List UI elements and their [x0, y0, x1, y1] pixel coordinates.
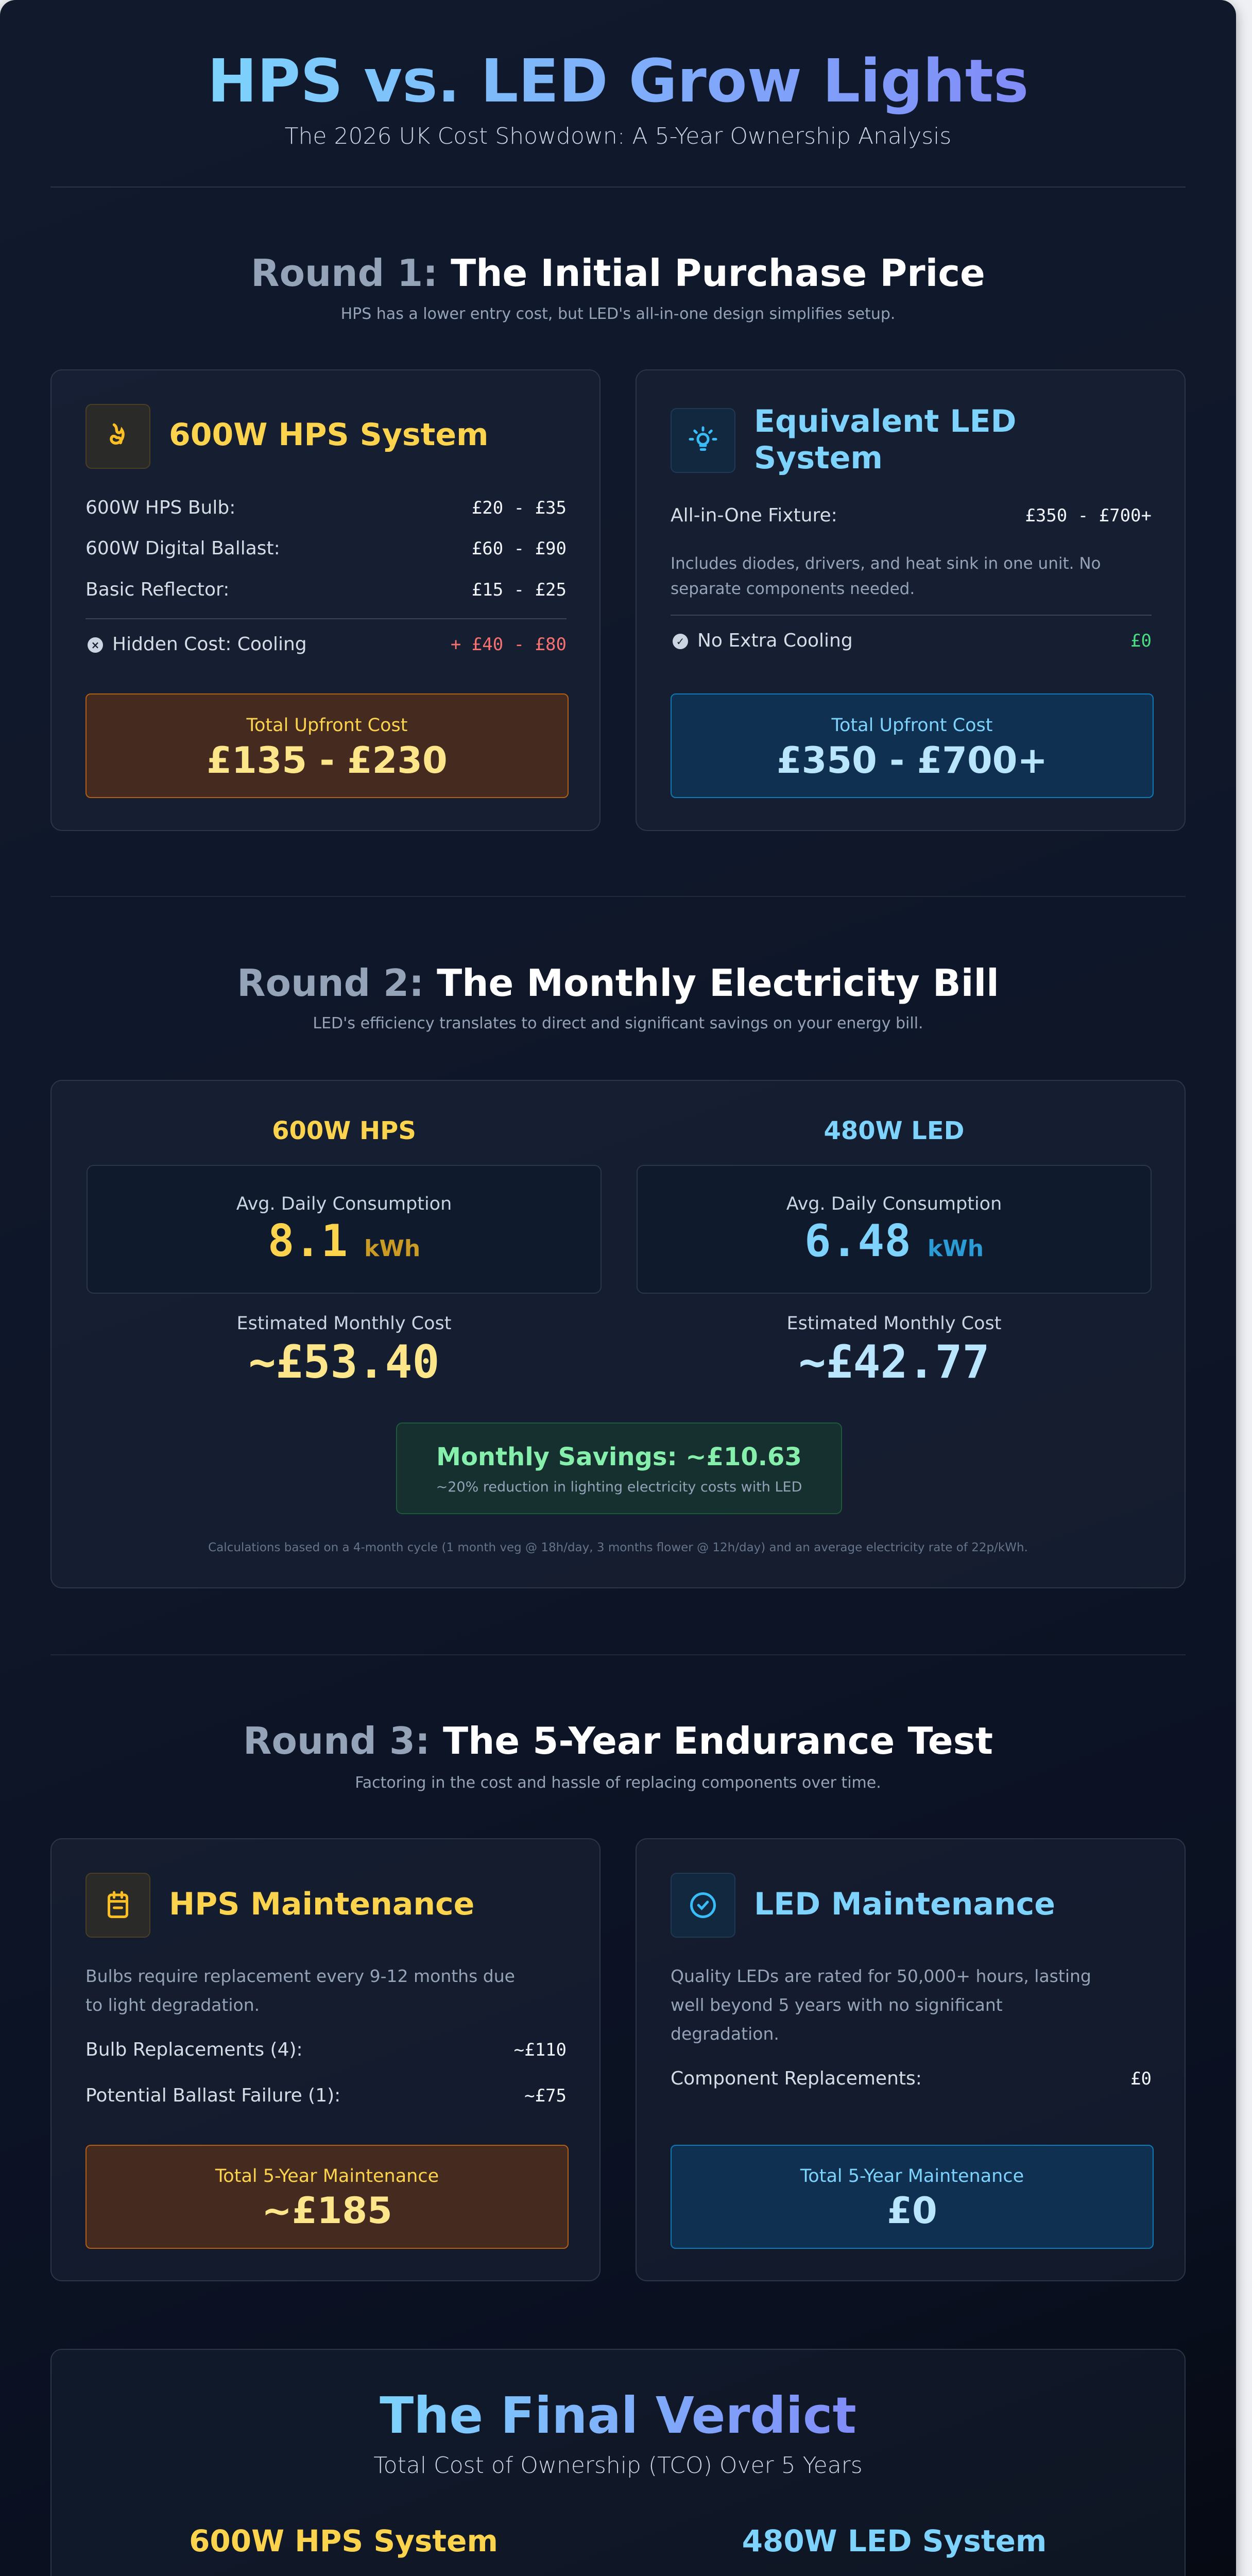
round 2 subheading: LED's efficiency translates to direct and significant savings on your energy bill. [313, 1014, 923, 1032]
round 3 subheading: Factoring in the cost and hassle of replacing components over time. [355, 1774, 881, 1792]
label: 480W LED: 480W LED [824, 1116, 965, 1145]
LED monthly cost: Estimated Monthly Cost [786, 1313, 1001, 1334]
stat box: LED daily consumption: Avg. Daily Consumption [786, 1194, 1002, 1214]
row: ballast [85, 538, 567, 559]
LED monthly cost: ~£42.77 [799, 1335, 989, 1388]
panel: HPS maintenance [50, 1838, 601, 2281]
row: fixture: All-in-One Fixture: [671, 505, 837, 526]
title: HPS vs. LED Grow Lights [208, 47, 1028, 116]
heading: Equivalent LED System: System [754, 440, 883, 476]
text: LED lifespan description: degradation. [671, 2024, 779, 2044]
heading: round 1: Round 1: The Initial Purchase Price [251, 251, 985, 295]
row: no extra cooling: No Extra Cooling [697, 630, 853, 651]
row: ballast failure: ~£75 [524, 2086, 567, 2106]
row: bulb replacements: Bulb Replacements (4): [85, 2039, 303, 2060]
icon: flame [85, 404, 150, 469]
subheading: TCO: Total Cost of Ownership (TCO) Over 5 Years [373, 2452, 863, 2479]
row: ballast: 600W Digital Ballast: [85, 538, 280, 559]
text: LED lifespan description [671, 1966, 1091, 2044]
HPS total: 600W HPS System [189, 2523, 498, 2558]
HPS monthly cost: ~£53.40 [249, 1335, 439, 1388]
heading: Equivalent LED System [754, 403, 1016, 476]
callout: monthly savings: Monthly Savings: ~£10.63 [436, 1443, 802, 1471]
icon: check circle: ✓ [676, 635, 684, 648]
total: HPS maintenance: Total 5-Year Maintenance [215, 2166, 439, 2187]
row: ballast failure: Potential Ballast Failure (1): [85, 2085, 340, 2106]
row: bulb [85, 497, 567, 518]
text: bulb description: Bulbs require replacement every 9-12 months due [85, 1966, 515, 1986]
panel: electricity comparison [50, 1080, 1186, 1588]
row: ballast failure [85, 2085, 567, 2106]
row: hidden cooling cost: + £40 - £80 [451, 634, 567, 655]
stat box: HPS daily consumption [87, 1165, 602, 1294]
row: hidden cooling cost [88, 634, 567, 655]
row: bulb replacements: ~£110 [514, 2040, 567, 2060]
heading: HPS Maintenance: HPS Maintenance [169, 1886, 474, 1922]
row: reflector: Basic Reflector: [85, 579, 229, 600]
heading: Equivalent LED System: Equivalent LED [754, 403, 1016, 439]
HPS monthly cost: Estimated Monthly Cost [236, 1313, 451, 1334]
icon: check circle [673, 634, 688, 649]
icon: lightbulb [671, 408, 735, 473]
LED total [742, 2523, 1047, 2576]
stat box: LED daily consumption [637, 1165, 1152, 1294]
icon: calendar [85, 1873, 150, 1938]
LED total: 480W LED System [742, 2523, 1047, 2558]
row: component replacements: £0 [1130, 2069, 1152, 2089]
row: bulb: 600W HPS Bulb: [85, 497, 235, 518]
heading: LED Maintenance: LED Maintenance [754, 1886, 1055, 1922]
stat box: HPS daily consumption: Avg. Daily Consumption [236, 1194, 452, 1214]
label: 600W HPS: 600W HPS [272, 1116, 416, 1145]
row: bulb replacements [85, 2039, 567, 2060]
round 1 subheading: HPS has a lower entry cost, but LED's all-in-one design simplifies setup. [341, 305, 895, 323]
total: LED upfront [671, 693, 1154, 798]
row: no extra cooling: £0 [1130, 631, 1152, 651]
text: LED lifespan description: well beyond 5 years with no significant [671, 1995, 1003, 2015]
row: reflector [85, 579, 567, 600]
total: HPS maintenance [85, 2145, 569, 2249]
heading: The Final Verdict: The Final Verdict [380, 2386, 856, 2445]
HPS monthly cost [236, 1313, 451, 1388]
row: reflector: £15 - £25 [472, 580, 567, 600]
callout: monthly savings: ~20% reduction in lighting electricity costs with LED [436, 1479, 802, 1495]
total: LED upfront: £350 - £700+ [777, 739, 1048, 782]
row: hidden cooling cost: Hidden Cost: Cooling [112, 634, 307, 655]
panel: LED upfront [636, 369, 1186, 831]
total: HPS maintenance: ~£185 [262, 2190, 392, 2232]
text: fixture description: Includes diodes, drivers, and heat sink in one unit. No separate components needed. [671, 554, 1101, 598]
panel: final verdict [50, 2349, 1186, 2576]
row: component replacements: Component Replacements: [671, 2068, 922, 2089]
panel: LED maintenance [636, 1838, 1186, 2281]
icon: x circle: × [91, 639, 99, 651]
callout: monthly savings [396, 1422, 842, 1514]
subtitle: The 2026 UK Cost Showdown: A 5-Year Ownership Analysis [285, 123, 951, 149]
icon: x circle [88, 637, 103, 653]
footnote: Calculations based on a 4-month cycle (1 month veg @ 18h/day, 3 months flower @ 12h/day) and an average electricity rate of 22p/kWh. [208, 1541, 1028, 1554]
row: fixture: £350 - £700+ [1025, 505, 1152, 526]
heading: round 2: Round 2: The Monthly Electricity Bill [237, 961, 999, 1005]
text: bulb description: to light degradation. [85, 1995, 260, 2015]
row: component replacements [671, 2068, 1152, 2089]
text: bulb description [85, 1966, 515, 2015]
total: HPS upfront: £135 - £230 [207, 739, 448, 782]
stat box: LED daily consumption: 6.48 kWh [804, 1215, 984, 1267]
HPS total [189, 2523, 498, 2576]
row: no extra cooling [673, 630, 1152, 651]
total: LED upfront: Total Upfront Cost [832, 715, 992, 736]
row: bulb: £20 - £35 [472, 498, 567, 518]
total: LED maintenance [671, 2145, 1154, 2249]
LED monthly cost [786, 1313, 1001, 1388]
total: HPS upfront: Total Upfront Cost [247, 715, 407, 736]
total: LED maintenance: £0 [887, 2190, 937, 2232]
icon: check circle [671, 1873, 735, 1938]
heading: 600W HPS System: 600W HPS System [169, 417, 489, 453]
stat box: HPS daily consumption: 8.1 kWh [268, 1215, 420, 1267]
total: LED maintenance: Total 5-Year Maintenance [800, 2166, 1024, 2187]
row: ballast: £60 - £90 [472, 538, 567, 559]
text: LED lifespan description: Quality LEDs are rated for 50,000+ hours, lasting [671, 1966, 1091, 1986]
row: fixture [671, 505, 1152, 526]
panel: HPS upfront [50, 369, 601, 831]
heading: round 3: Round 3: The 5-Year Endurance Test [243, 1719, 993, 1762]
total: HPS upfront [85, 693, 569, 798]
